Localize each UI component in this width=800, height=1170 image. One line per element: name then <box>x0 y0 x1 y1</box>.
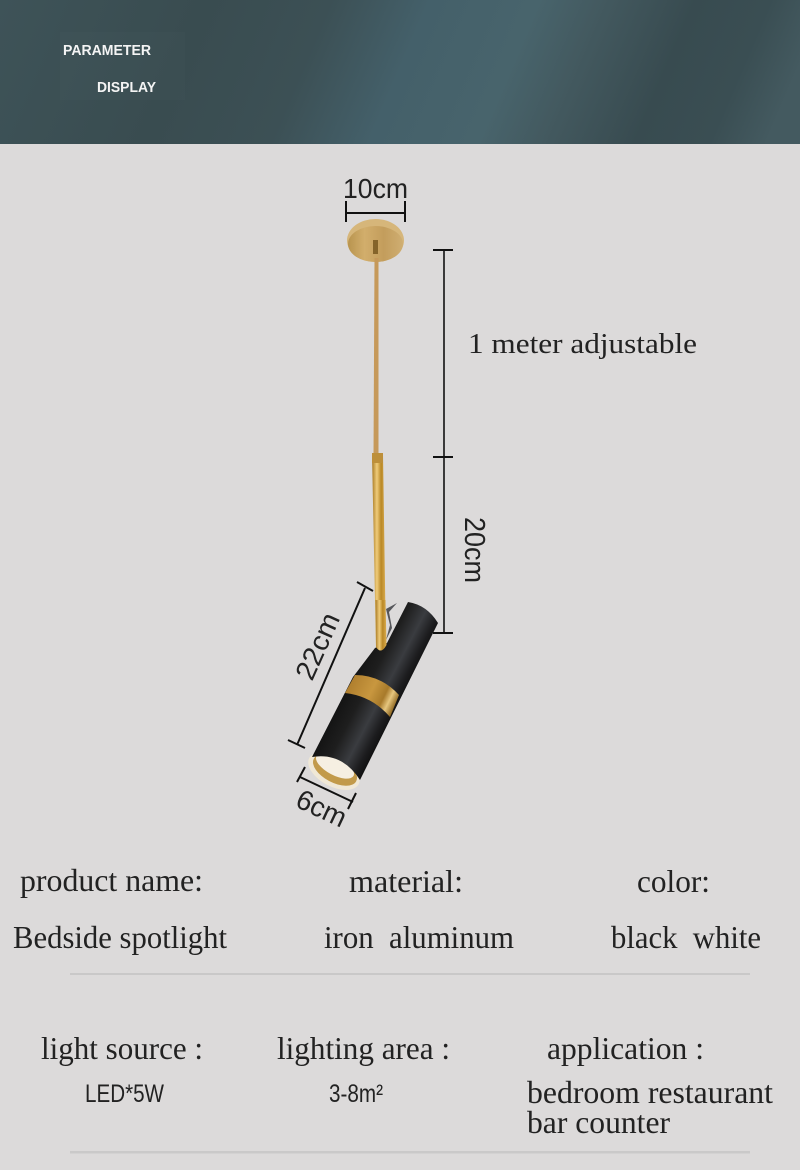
spec: product name: Bedside spotlight <box>13 919 227 955</box>
spec: material: iron aluminum <box>324 919 514 955</box>
adjustable length note: 1 meter adjustable <box>468 328 697 360</box>
thin adjustable rod <box>374 258 378 456</box>
spec: color: color: <box>637 863 710 899</box>
upper gold tube <box>372 455 386 648</box>
spec: light source: light source : <box>41 1030 203 1066</box>
header title <box>63 42 156 96</box>
spec: application: application : <box>547 1030 704 1066</box>
dimension labels <box>289 173 490 833</box>
dimension: 22cm <box>288 582 373 748</box>
spec: material: material: <box>349 863 463 899</box>
dimension lines <box>288 201 453 809</box>
spec row 1 <box>13 862 761 955</box>
ceiling canopy <box>347 219 404 262</box>
spec: color: black white <box>611 919 761 955</box>
spec row 2 <box>41 1030 773 1140</box>
dimension: 6cm <box>297 767 356 809</box>
rear fin <box>386 603 397 640</box>
spec: product name <box>13 862 227 955</box>
spec: product name: product name: <box>20 862 203 898</box>
gold rod over cylinder <box>376 600 386 651</box>
dimension labels: 20cm <box>458 517 490 583</box>
header title: PARAMETER <box>63 42 151 59</box>
spec: material <box>324 863 514 955</box>
spec: light source <box>41 1030 203 1108</box>
dimension: height <box>433 250 453 633</box>
dimension labels: 6cm <box>291 783 352 833</box>
dimension labels: 22cm <box>289 608 346 684</box>
spec: light source: LED*5W <box>85 1080 164 1108</box>
dimension labels: 10cm <box>343 173 408 204</box>
black cylinder <box>312 602 438 780</box>
spec: lighting area: 3-8m² <box>329 1080 383 1108</box>
spec: application: bedroom restaurant <box>527 1074 773 1110</box>
gold band <box>345 675 399 717</box>
header banner <box>0 0 800 144</box>
spec: application: bar counter <box>527 1104 670 1140</box>
dimension: 10cm <box>346 201 405 222</box>
spec: lighting area: lighting area : <box>277 1030 450 1066</box>
spec: color <box>611 863 761 955</box>
spec: application <box>527 1030 773 1140</box>
lens opening <box>302 744 366 798</box>
spec: lighting area <box>277 1030 450 1108</box>
lamp illustration <box>302 219 438 798</box>
header title: DISPLAY <box>97 79 156 96</box>
